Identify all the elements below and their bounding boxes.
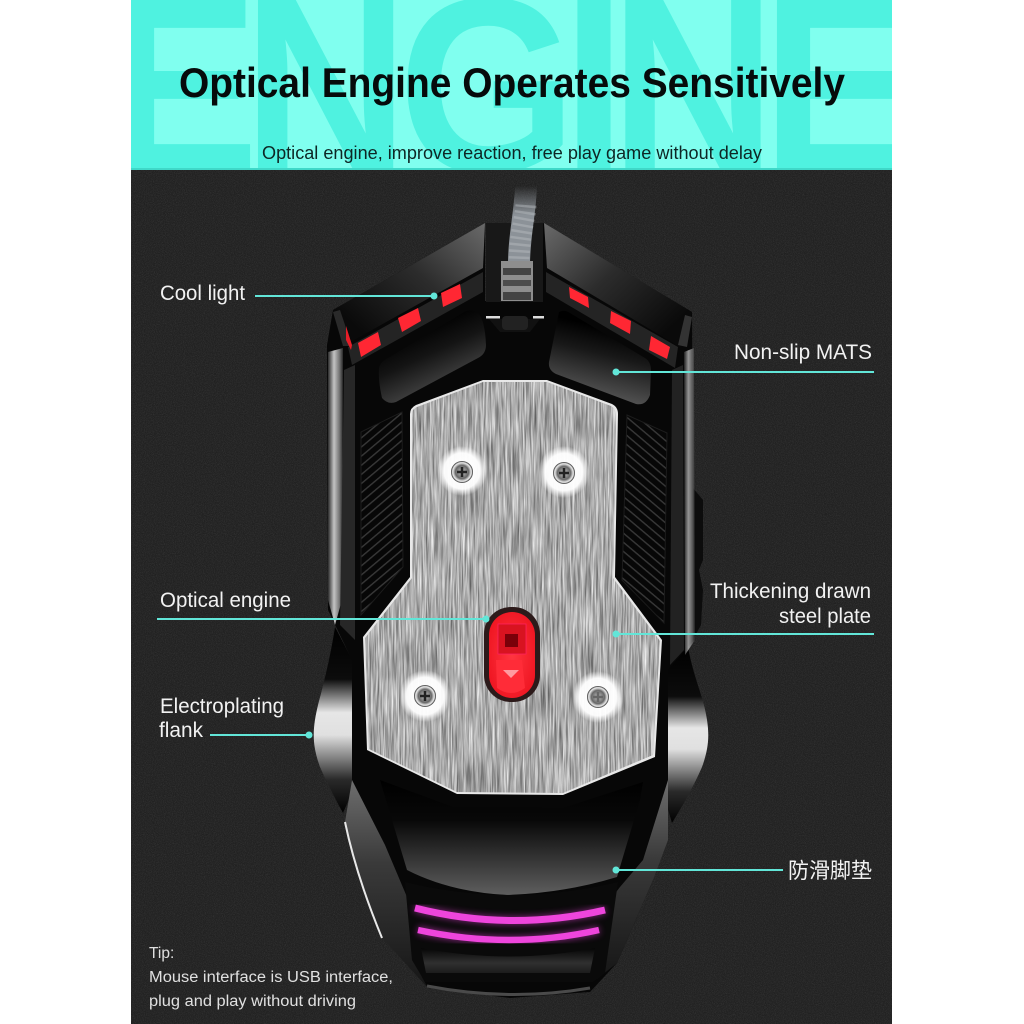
light bar frame: [405, 882, 618, 982]
grip texture left: [361, 412, 403, 615]
tip note: [149, 945, 393, 1010]
side button: [690, 487, 703, 645]
left top button: [333, 223, 485, 345]
inner side band left: [340, 365, 355, 640]
bottom pad: [380, 780, 643, 895]
inner side band right: [670, 365, 684, 665]
callout: electroplating flank: Electroplating: [160, 694, 284, 718]
callout: non-slip mats: Non-slip MATS: [734, 340, 872, 364]
callout: optical engine: Optical engine: [160, 588, 291, 612]
drawn steel plate: [363, 380, 662, 795]
flank left: [314, 627, 356, 813]
callout: cool light: Cool light: [160, 281, 245, 305]
callout: cool light: [160, 281, 438, 305]
grip texture right: [622, 415, 667, 623]
title: Optical Engine Operates Sensitively: [179, 59, 846, 106]
rear shell left: [345, 780, 428, 988]
rear shell right: [597, 780, 668, 979]
screw top right: [538, 446, 590, 498]
rear base rim: [427, 986, 590, 995]
callout: electroplating flank: flank: [159, 718, 203, 742]
subtitle: Optical engine, improve reaction, free play game without delay: [262, 143, 762, 163]
screw top left: [437, 446, 487, 496]
button tip left: [333, 310, 352, 346]
tip note: Tip:: [149, 945, 174, 962]
LED strip right: [546, 272, 678, 368]
screw bottom left: [399, 670, 451, 722]
callout: electroplating flank: [159, 694, 312, 742]
callout: anti-slip foot pad: [612, 859, 872, 883]
callout: non-slip mats: [612, 340, 874, 376]
callout: optical engine: [157, 588, 490, 622]
pink light bar lower: [418, 930, 599, 940]
tip note: plug and play without driving: [149, 993, 356, 1010]
mouse illustration: [314, 186, 708, 998]
button tip right: [678, 315, 692, 347]
callout: thickening drawn steel plate: steel plate: [779, 604, 871, 628]
LED strip left: [346, 272, 483, 365]
header banner: [131, 0, 892, 170]
chrome strip rear left: [345, 822, 382, 938]
callout: thickening drawn steel plate: Thickening drawn: [710, 579, 871, 603]
optical sensor: [484, 607, 540, 702]
body shell: [327, 223, 694, 998]
non-slip pad left: [379, 310, 486, 403]
callout: anti-slip foot pad: 防滑脚垫: [788, 859, 872, 883]
callout: thickening drawn steel plate: [612, 579, 874, 638]
right top button: [544, 223, 692, 347]
cable slot: [486, 223, 543, 302]
dark background panel: [131, 169, 892, 1024]
pink light glow: [415, 908, 605, 940]
tip note: Mouse interface is USB interface,: [149, 969, 393, 986]
rear window: [421, 948, 595, 973]
non-slip pad right: [549, 311, 651, 404]
chrome edge right: [684, 348, 695, 655]
pink light bar upper: [415, 908, 605, 921]
chrome edge left: [328, 348, 343, 625]
scroll wheel base: [486, 316, 544, 332]
cable: [501, 186, 533, 301]
flank right: [660, 647, 708, 823]
screw bottom right: [572, 671, 624, 723]
